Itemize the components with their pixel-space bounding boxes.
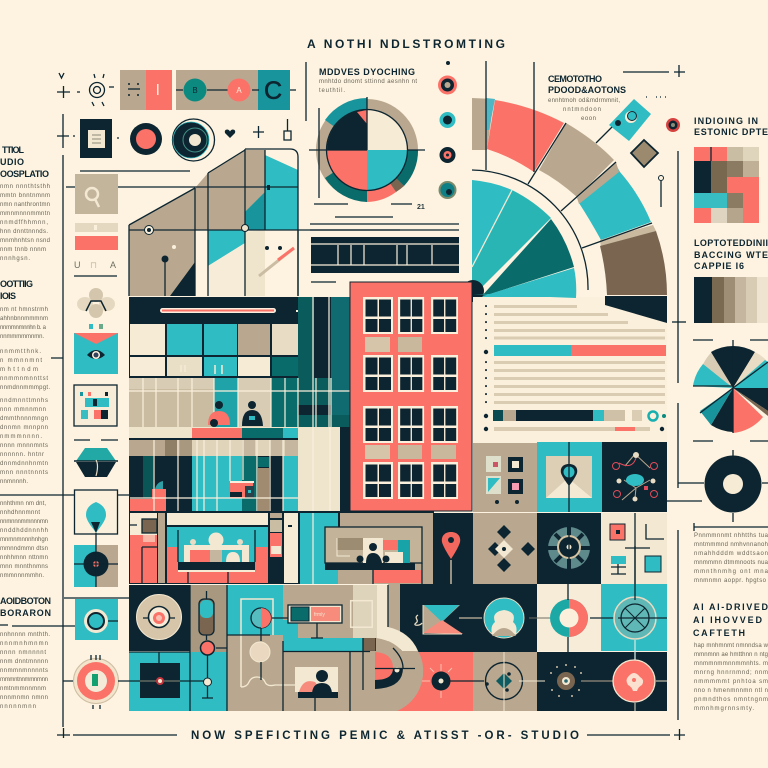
text block: right lower: mmnthnmhg ont mna — [694, 569, 768, 575]
text block: AI driven: AI IHOVVED — [693, 615, 762, 625]
tile: process chain — [176, 70, 296, 110]
donut — [667, 450, 768, 522]
icon: teal swirl — [438, 181, 456, 199]
text block: left three — [0, 596, 86, 710]
icon: tool — [284, 119, 291, 140]
text block: left two: nnmmnmnnttst — [0, 376, 48, 382]
heading: right two: LOPTOTEDDINII — [694, 238, 768, 248]
ring arch — [370, 585, 423, 711]
icon: hexagon — [74, 440, 118, 477]
text block: left two: nnmmmmmnmn. — [0, 334, 44, 340]
text block: left one: nnmdffhhmnn, — [0, 220, 48, 226]
caption: pie heading — [306, 62, 417, 121]
text block: left two: nnmmnmnnhn b. a — [0, 325, 47, 331]
icon: diamond — [631, 140, 658, 167]
text block: AI driven: AI AI-DRIVED — [693, 602, 768, 612]
text block: AI driven: nno n hmenmnnmn ntl n — [694, 688, 768, 694]
lower stripes — [130, 440, 298, 511]
text block: right lower: Pnnmmnnmt nhhtths tua — [694, 533, 768, 539]
text block: left two: mnn nnntnnnts — [0, 470, 48, 476]
icon: ring tile — [64, 598, 130, 640]
striped status bars: 21 — [417, 204, 425, 211]
text block: left two: nnnn mnnnmnts — [0, 443, 48, 449]
text block: left three: nnhnnnn mnthth. — [0, 632, 50, 638]
icon: coral disc — [130, 123, 162, 155]
text block: left two: nnhdhnnmnnt — [0, 510, 40, 516]
heading: right two: CAPPIE I6 — [694, 261, 744, 271]
text block: AI driven — [693, 602, 768, 712]
caption: fan heading: eoon — [581, 116, 596, 122]
windows — [363, 297, 458, 499]
icon: teal envelope with eye — [74, 333, 118, 374]
tile: process chain: B — [192, 86, 198, 95]
right pale block — [298, 427, 340, 511]
caption: pie heading: teuthtil. — [319, 88, 345, 94]
text block: left two: nnmnnnmmnnnmn — [0, 519, 48, 525]
chart: small donut — [529, 584, 618, 652]
text block: left three: nnm dnntmnnnn — [0, 659, 48, 665]
icon: nodes — [77, 288, 115, 329]
icon: coral target — [422, 664, 484, 698]
text block: right lower: mnmmmn dtmmnoots nua — [694, 560, 768, 566]
title: A NOTHI NDLSTROMTING — [307, 37, 505, 51]
tile: narrow strips — [270, 513, 338, 584]
text block: left three: AOIDBOTON — [0, 596, 51, 606]
text block: left two: nmmnnnmmhn. — [0, 573, 44, 579]
tiles right of row two — [434, 513, 667, 597]
icon: teal frame line art — [227, 599, 295, 687]
tiles lower left — [118, 585, 420, 711]
dots column — [438, 61, 457, 199]
icon: teal dot — [440, 112, 456, 128]
icon: framed note — [80, 119, 112, 158]
fan lines — [472, 61, 652, 290]
caption: pie heading: MDDVES DYOCHING — [319, 67, 415, 77]
right pie chart — [693, 340, 768, 441]
icon: coral dot with line — [200, 641, 227, 698]
text block: left two: nm nt hmnstrmh — [0, 307, 48, 313]
text block: AI driven: pnmndthos nmntngnm — [694, 697, 768, 703]
text block: left two: mhttndm — [0, 367, 38, 373]
text block: left two — [0, 279, 130, 579]
slider — [494, 427, 650, 431]
bars — [75, 223, 118, 250]
text block: left one: nnnhgsn. — [0, 256, 30, 262]
icon: coral dot — [438, 76, 457, 94]
text block: left two: mnmnmnnnhnhgn — [0, 537, 48, 543]
text block: left two: nnhhmnn nttnmn — [0, 555, 48, 561]
icon: red dot — [666, 118, 680, 132]
status bar — [493, 410, 666, 421]
text block: left two: n mmnnmnt — [0, 358, 42, 364]
heatmap — [694, 147, 759, 223]
text block: AI driven: hap mnhmnmt nmnndsa w — [694, 643, 768, 649]
icon: dark square with target — [118, 652, 204, 698]
heading: right two: BACCING WTE — [694, 250, 768, 260]
caption: fan heading: CEMOTOTHO — [548, 74, 602, 84]
icon: diamonds — [488, 525, 535, 572]
icon: network — [612, 452, 658, 502]
progress bar — [494, 345, 666, 356]
text block: AI driven: nmmmmmt pnhtoa sm — [694, 679, 768, 685]
tile: tan and coral — [120, 70, 172, 110]
icon: coral medallion — [613, 660, 667, 711]
text block: left one: mmtn bnntnmnm — [0, 193, 50, 199]
glyph row: A — [110, 260, 116, 270]
text block: left one: UDIO — [0, 157, 24, 167]
tonal strip — [672, 277, 768, 323]
icon: portrait medallion — [484, 598, 524, 638]
caption: fan heading: nntmndoon — [563, 107, 601, 113]
top left building — [66, 149, 400, 296]
person: coral — [208, 401, 230, 427]
left icon column — [63, 174, 130, 709]
icon: magnifier tile — [75, 174, 118, 214]
icon: swirl — [550, 664, 613, 697]
icon: dial — [136, 594, 182, 640]
text block: left three: nnnn nmnnnnt — [0, 650, 46, 656]
outer band — [472, 98, 667, 323]
text block: AI driven: mmnmnn ae hmtthnn n ntg — [694, 652, 768, 658]
glyph row: ⊓ — [90, 260, 97, 270]
caption: fan heading — [548, 74, 626, 122]
counter band — [129, 427, 298, 456]
screen card: frmly — [314, 612, 325, 618]
text block: left one: OOSPLATIO — [0, 169, 49, 179]
text block: left three: nnnnnmnn — [0, 704, 36, 710]
text block: left two: nnmmtthnk. — [0, 349, 41, 355]
caption: fan heading: ennhtmoh od&mdrmmnit, — [548, 98, 620, 104]
right column rule — [677, 151, 679, 720]
icon: coral badge — [63, 655, 118, 709]
tiles row one — [473, 442, 667, 512]
top left icon row — [57, 70, 296, 110]
text block: left three: mmmntnnmmnmnn — [0, 677, 48, 683]
text block: left two: mmnndmmn dtsn — [0, 546, 48, 552]
heading: right one: ESTONIC DPTE — [694, 127, 768, 137]
icon: split tile — [74, 533, 118, 587]
text block: left three: nmtnmmnnmnm — [0, 686, 46, 692]
tile: meeting frame — [167, 513, 268, 584]
text block: left two: nnn mmnnmnn — [0, 407, 46, 413]
pale block with square outline — [351, 585, 388, 638]
text block: left three: nnmmnmnnnnts — [0, 668, 48, 674]
text block: AI driven: CAFTETH — [693, 628, 745, 638]
icon: pill capsule — [199, 591, 214, 640]
caption: pie heading: mnhtdo dnomt sttinnd aesnhn nt — [319, 79, 417, 85]
icon: location pin — [442, 532, 460, 597]
icon: envelope — [415, 605, 482, 634]
text block: left one: nmn nanthrontmn — [0, 202, 50, 208]
person: dark — [242, 401, 263, 426]
glyph row: U — [74, 260, 80, 270]
icon: teal card — [596, 99, 651, 143]
text block: left three: BORARON — [0, 608, 51, 618]
text block: left two: mnn mnnthnmns — [0, 564, 48, 570]
caption: fan heading: PDOOD&AOTONS — [548, 85, 626, 95]
icon: black dot — [440, 147, 456, 163]
icon: map pin envelope — [546, 442, 592, 512]
glyph row — [74, 260, 117, 276]
icon: heart — [225, 130, 235, 138]
screen card — [272, 605, 342, 638]
text block: right lower: mnmnmn aoppr. hpgtso — [694, 578, 767, 584]
document panel — [473, 294, 667, 443]
tiles lower right — [370, 513, 667, 711]
icon: framed drop — [74, 490, 118, 534]
text block: left one — [0, 145, 50, 262]
tile: process chain: C — [264, 77, 282, 105]
pill — [160, 308, 300, 313]
coral building — [350, 282, 472, 511]
top pie chart — [309, 97, 425, 204]
text block: right lower — [694, 523, 768, 584]
text block: AI driven: mnmmnmmnnmmnhts. m — [694, 661, 768, 667]
text block: left two: OOTTIIG — [0, 279, 33, 289]
inner fan — [462, 180, 576, 302]
text block: left two: dnnmdnnhnmtn — [0, 461, 48, 467]
window grid — [129, 378, 350, 427]
icon: small squares — [486, 456, 523, 504]
text block: left two: ahhnbnnmmmnm — [0, 316, 48, 322]
fan chart — [462, 61, 667, 323]
text block: AI driven: mmnhmgrnnsmty. — [694, 706, 754, 712]
tile: process chain: A — [236, 86, 242, 95]
icon: target — [172, 119, 214, 161]
heading: right one: INDIOING IN — [694, 116, 758, 126]
footer: NOW SPEFICTING PEMIC & ATISST -OR- STUDIO — [191, 730, 579, 742]
text block: left one: TTIOL — [2, 145, 24, 155]
icon: teal globe — [614, 513, 667, 660]
text block: right lower: mntmmmnd nmhvnnanoh — [694, 542, 768, 548]
tile: workstation — [325, 513, 433, 584]
text block: left two: dmmthnnnmngn — [0, 416, 48, 422]
second icon row — [57, 114, 291, 161]
text block: left two: nnmnnnh. — [0, 479, 28, 485]
text block: left two: nnhthmn nm dnt, — [0, 501, 46, 507]
icon: pin — [658, 176, 664, 207]
text block: right lower: nmahhdddm wddtsaon — [694, 551, 768, 557]
striped status bars — [310, 204, 459, 282]
text block: left two: nnmdnnmmmpgt. — [0, 385, 50, 391]
text block: left three: nnnmnhmnmn — [0, 641, 48, 647]
text block: left two: nmmmnnnn. — [0, 434, 42, 440]
text block: left one: nmn nnnthtsthh — [0, 184, 50, 190]
heading: right one — [694, 116, 768, 137]
tile: left stack — [130, 513, 165, 583]
text block: left two: nnddhddnnnhh — [0, 528, 48, 534]
text block: left two: nnnnnn. hntnr — [0, 452, 44, 458]
text block: left two: dnnmn mnnpnn — [0, 425, 48, 431]
text block: left one: hnn dnnttnnnds. — [0, 229, 48, 235]
scene: person card — [295, 667, 338, 698]
text block: left three: nnnmnmn nmnn — [0, 695, 48, 701]
left column rules — [57, 155, 685, 740]
tiles left of row two — [129, 511, 434, 584]
icon: gear — [548, 513, 590, 584]
text block: left one: mmnmnnnmmntn — [0, 211, 50, 217]
heading: right two — [694, 238, 768, 271]
text block: left two: nndmnnttmnhs — [0, 398, 48, 404]
icon: framed swatches — [74, 385, 117, 426]
top right accents — [596, 65, 685, 207]
icon: dashed diamond dial — [485, 652, 545, 711]
text block: left one: nnm tnnb nnnm — [0, 247, 46, 253]
central dark block — [129, 297, 350, 511]
icon: small panels — [610, 524, 664, 590]
text block: left two: IOIS — [0, 291, 16, 301]
text block: AI driven: mnrng hnnrnmnd; nnm — [694, 670, 768, 676]
icon: sun — [90, 74, 114, 106]
text block: left one: mnmhnhtsn nsnd — [0, 238, 50, 244]
